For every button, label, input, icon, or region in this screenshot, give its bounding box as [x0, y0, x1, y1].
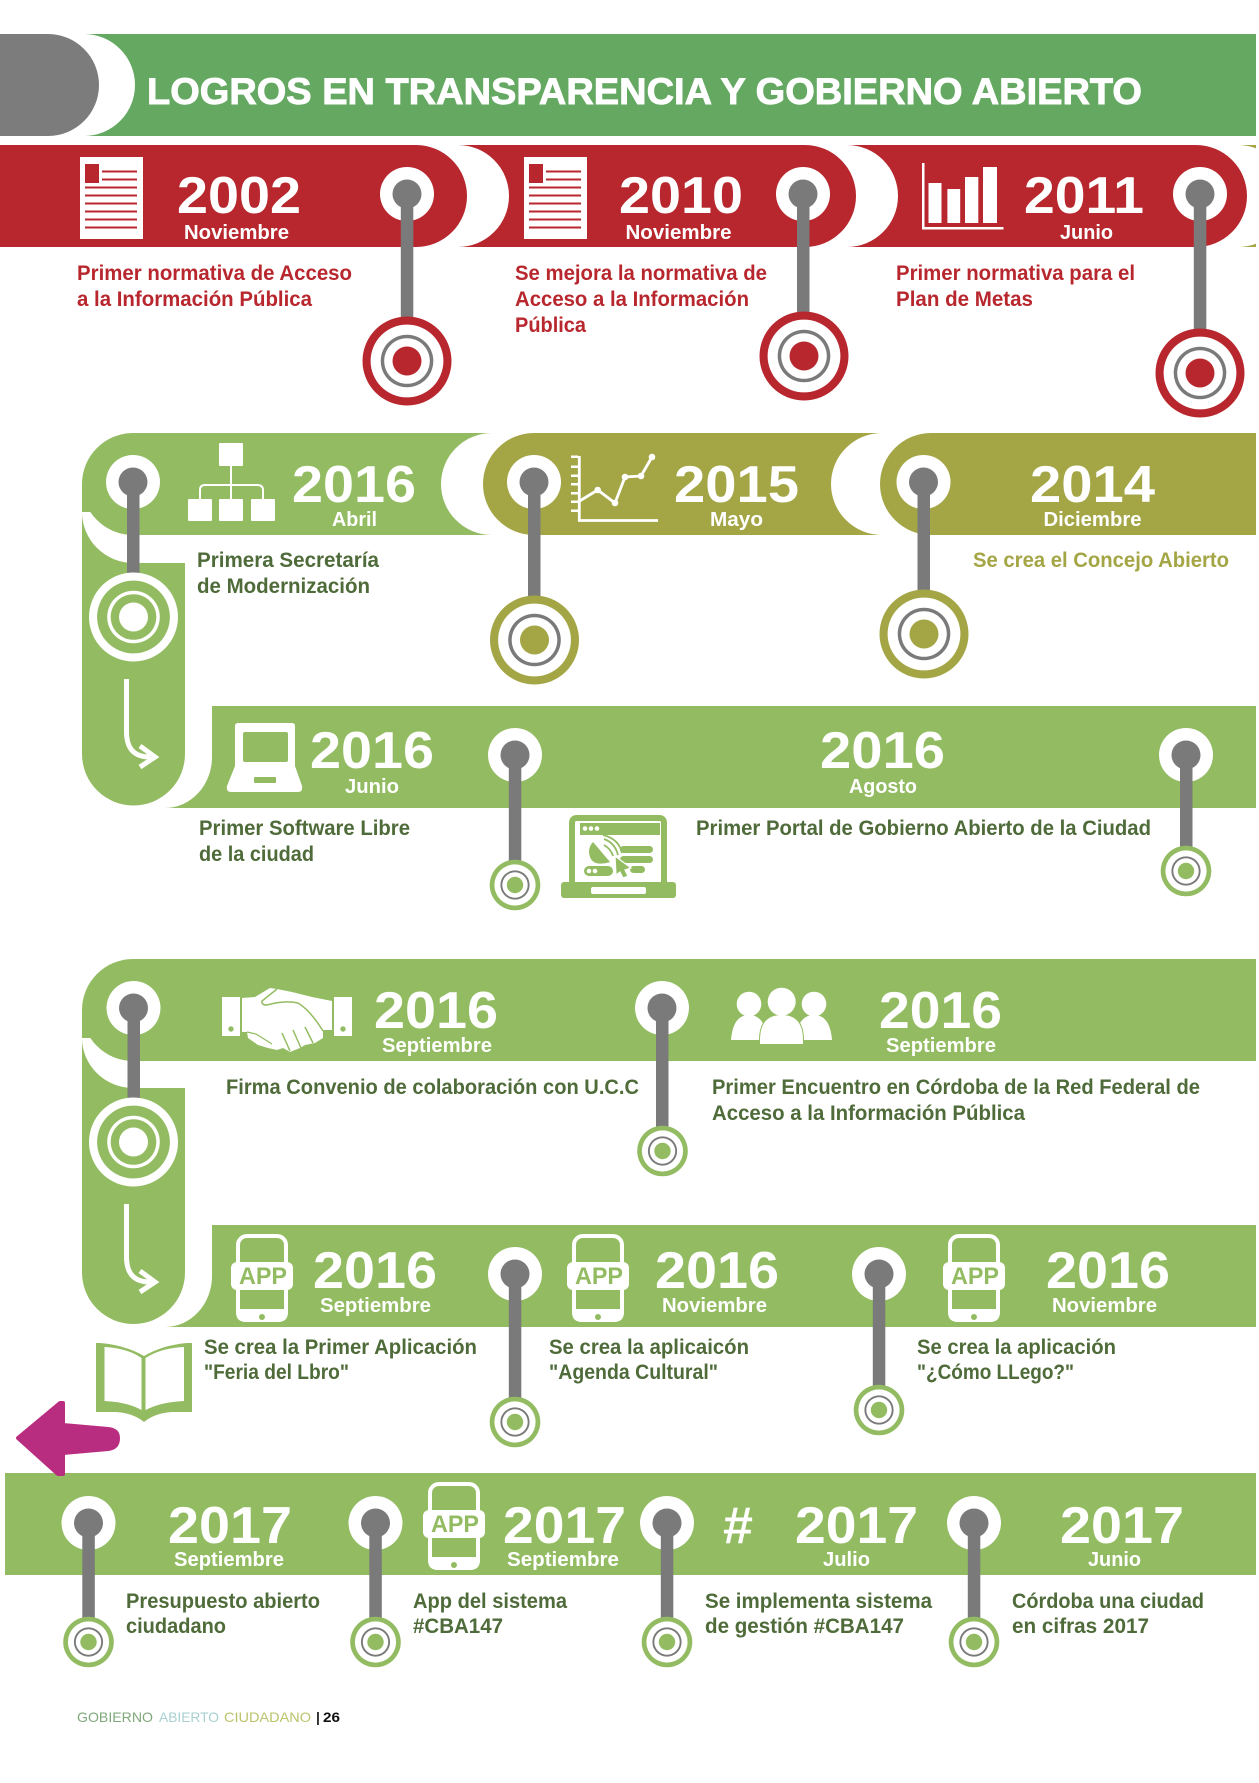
year 2016: 2016: [1046, 1242, 1170, 1300]
icon: app phone: [567, 1236, 629, 1320]
header bar: [0, 34, 1256, 136]
pin gestion: [640, 1496, 694, 1667]
pin como llego: [852, 1247, 906, 1435]
description presupuesto: Presupuesto abierto: [126, 1590, 320, 1613]
description secretaria: [197, 549, 379, 598]
footer: CIUDADANO: [224, 1709, 311, 1725]
icon: web portal laptop: [561, 818, 676, 898]
description feria: Se crea la Primer Aplicación: [204, 1336, 477, 1359]
title: LOGROS EN TRANSPARENCIA Y GOBIERNO ABIERTO: [147, 70, 1142, 112]
description 2010: [515, 262, 767, 337]
description app sistema: [413, 1590, 567, 1638]
arrow: turn down right: [126, 679, 155, 767]
footer: GOBIERNO: [77, 1709, 153, 1725]
description cifras: [1012, 1590, 1204, 1638]
description 2002: Primer normativa de Acceso: [77, 262, 352, 285]
month: Noviembre: [184, 222, 289, 244]
icon: laptop: [227, 723, 302, 792]
month: Septiembre: [382, 1035, 492, 1057]
month: Septiembre: [507, 1549, 619, 1571]
icon: newspaper 2010: [524, 157, 587, 239]
description 2011: Plan de Metas: [896, 288, 1033, 311]
pin encuentro: [635, 981, 689, 1176]
icon: app phone: APP: [431, 1511, 479, 1538]
year 2016 septiembre: 2016: [879, 982, 1002, 1040]
description gestion: [705, 1590, 932, 1638]
icon: newspaper 2002: [80, 157, 143, 239]
icon: open book: [96, 1343, 192, 1422]
icon: handshake: [222, 988, 352, 1052]
icon: app phone: [423, 1484, 485, 1568]
icon: app phone: APP: [575, 1263, 623, 1290]
footer: |: [316, 1709, 320, 1725]
description agenda: Se crea la aplicaicón: [549, 1336, 749, 1359]
description como llego: "¿Cómo LLego?": [917, 1361, 1074, 1384]
month: Junio: [1088, 1549, 1141, 1571]
pin 2016 abril: [89, 455, 178, 662]
panel: red timeline 2002-2011: [0, 140, 1259, 418]
description como llego: Se crea la aplicación: [917, 1336, 1116, 1359]
pin 2016 junio: [488, 728, 542, 910]
description gestion: de gestión #CBA147: [705, 1615, 904, 1638]
icon: people: [731, 988, 832, 1044]
description feria: "Feria del Lbro": [204, 1361, 349, 1384]
description 2010: Acceso a la Información: [515, 288, 749, 311]
month: Julio: [823, 1549, 870, 1571]
pin 2002: [362, 167, 452, 406]
icon: app phone: APP: [239, 1263, 287, 1290]
year 2016 septiembre: 2016: [374, 982, 498, 1040]
footer: 26: [323, 1709, 340, 1725]
panel: green timeline junio agosto 2016: [165, 706, 1256, 910]
description cifras: en cifras 2017: [1012, 1615, 1149, 1638]
pin 2014: [880, 455, 968, 678]
description encuentro: Acceso a la Información Pública: [712, 1102, 1025, 1125]
icon: app phone: APP: [951, 1263, 999, 1290]
year 2002: 2002: [177, 167, 301, 225]
description 2011: Primer normativa para el: [896, 262, 1135, 285]
description app sistema: #CBA147: [413, 1615, 503, 1638]
icon: org chart: [188, 443, 275, 521]
pin cifras: [947, 1496, 1001, 1667]
panel: green timeline aplicaciones 2016: [96, 1225, 1256, 1447]
year 2017 septiembre: 2017: [503, 1497, 626, 1555]
footer: [77, 1709, 340, 1725]
month: Junio: [1060, 222, 1113, 244]
pin 2010: [760, 167, 848, 400]
month: Noviembre: [662, 1295, 767, 1317]
icon: hash: #: [723, 1497, 753, 1555]
description secretaria: de Modernización: [197, 575, 370, 598]
year 2017 septiembre: 2017: [168, 1497, 292, 1555]
year 2016 junio: 2016: [310, 722, 434, 780]
month: Junio: [345, 776, 399, 798]
pin presupuesto: [62, 1496, 116, 1667]
month: Diciembre: [1044, 509, 1142, 531]
description software libre: [199, 817, 410, 866]
year 2011: 2011: [1024, 167, 1144, 225]
month: Noviembre: [626, 222, 732, 244]
pin 2016 agosto: [1159, 728, 1213, 896]
pin agenda: [488, 1247, 542, 1447]
month: Abril: [332, 509, 377, 531]
month: Septiembre: [174, 1549, 284, 1571]
description agenda: "Agenda Cultural": [549, 1361, 718, 1384]
description encuentro: [712, 1076, 1200, 1125]
icon: app phone: [943, 1236, 1005, 1320]
description secretaria: Primera Secretaría: [197, 549, 379, 572]
description 2002: a la Información Pública: [77, 288, 312, 311]
description agenda: [549, 1336, 749, 1384]
year 2010: 2010: [619, 167, 743, 225]
year 2014: 2014: [1030, 456, 1155, 514]
description gestion: Se implementa sistema: [705, 1590, 932, 1613]
description app sistema: App del sistema: [413, 1590, 567, 1613]
icon: app phone: [231, 1236, 293, 1320]
icon: line chart: [571, 454, 658, 520]
year 2017 julio: 2017: [795, 1497, 918, 1555]
month: Mayo: [710, 509, 763, 531]
description como llego: [917, 1336, 1116, 1384]
description concejo: Se crea el Concejo Abierto: [973, 549, 1229, 572]
description 2010: Pública: [515, 314, 586, 337]
description 2011: [896, 262, 1135, 311]
description software libre: de la ciudad: [199, 843, 314, 866]
month: Agosto: [849, 776, 917, 798]
year 2016 abril: 2016: [292, 456, 416, 514]
month: Noviembre: [1052, 1295, 1157, 1317]
description encuentro: Primer Encuentro en Córdoba de la Red Federal de: [712, 1076, 1200, 1099]
description feria: [204, 1336, 477, 1384]
year 2017 junio: 2017: [1060, 1497, 1184, 1555]
description portal: Primer Portal de Gobierno Abierto de la Ciudad: [696, 817, 1151, 840]
footer: ABIERTO: [159, 1709, 219, 1725]
description presupuesto: ciudadano: [126, 1615, 226, 1638]
arrow: turn down right: [126, 1204, 155, 1292]
panel: green timeline septiembre 2016: [82, 959, 1256, 1324]
description 2002: [77, 262, 352, 311]
description convenio: Firma Convenio de colaboración con U.C.C: [226, 1076, 639, 1099]
month: Septiembre: [320, 1295, 431, 1317]
description presupuesto: [126, 1590, 320, 1638]
year 2015: 2015: [674, 456, 799, 514]
year 2016: 2016: [313, 1242, 437, 1300]
year 2016: 2016: [655, 1242, 779, 1300]
arrow: magenta left: [18, 1403, 118, 1474]
year 2016 agosto: 2016: [820, 722, 945, 780]
description software libre: Primer Software Libre: [199, 817, 410, 840]
panel: green and olive timeline 2016-2014: [82, 433, 1256, 805]
pin 2015: [490, 455, 579, 684]
description 2010: Se mejora la normativa de: [515, 262, 767, 285]
description cifras: Córdoba una ciudad: [1012, 1590, 1204, 1613]
pin 2011: [1156, 167, 1244, 418]
pin convenio: [89, 981, 178, 1186]
month: Septiembre: [886, 1035, 996, 1057]
pin app sistema: [348, 1496, 402, 1667]
panel: green timeline 2017: [5, 1403, 1256, 1667]
icon: bar chart: [922, 163, 1004, 230]
grey end cap: [0, 34, 99, 136]
